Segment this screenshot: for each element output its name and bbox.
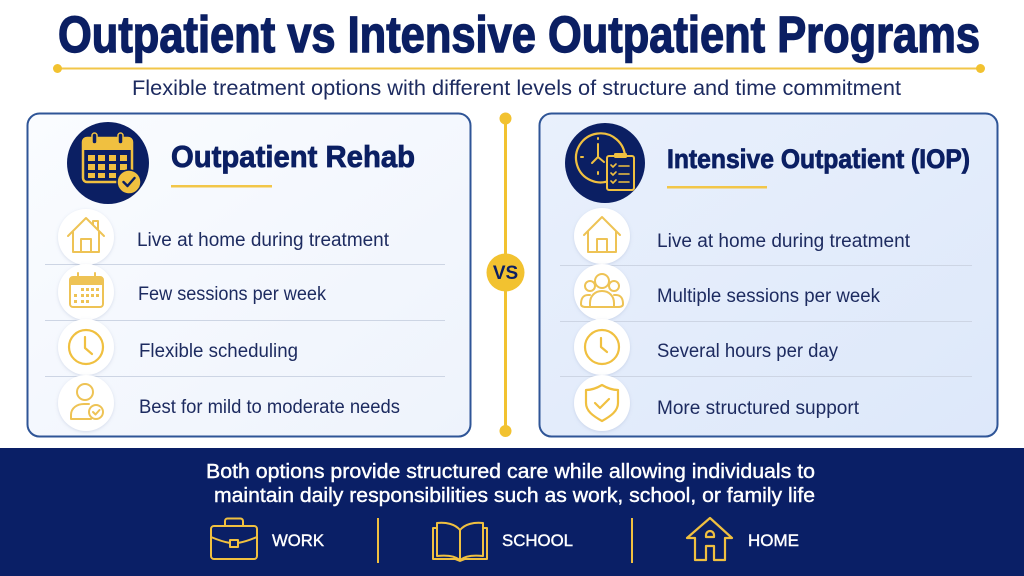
row: several hours [574,319,838,375]
row: flexible scheduling [58,319,298,375]
row: few sessions [58,264,326,320]
panel heading: Intensive Outpatient (IOP) [667,144,970,174]
row: multiple sessions [574,264,880,320]
row: several hours: Several hours per day [657,341,838,362]
row: live at home: Live at home during treatment [137,230,390,251]
panel: outpatient rehab [28,114,470,436]
icon: clock with clipboard [565,123,645,203]
row: structured support [574,375,860,431]
row: structured support: More structured support [657,398,860,419]
label: work: WORK [272,531,325,550]
row: live at home [574,208,911,264]
row: multiple sessions: Multiple sessions per week [657,286,880,307]
heading underline [171,185,272,188]
footer message [206,461,815,507]
icon: calendar with check [67,122,149,204]
row: flexible scheduling: Flexible scheduling [139,341,298,362]
label: home: HOME [748,531,799,550]
row: live at home: Live at home during treatment [657,231,911,252]
row: mild to moderate: Best for mild to moderate needs [139,397,400,418]
icon: briefcase [211,518,257,559]
panel heading: Outpatient Rehab [171,139,415,174]
vs connector: VS [493,263,518,284]
subtitle: Flexible treatment options with different levels of structure and time commitment [132,77,901,100]
footer message: maintain daily responsibilities such as work, school, or family life [214,485,815,507]
heading underline [667,186,767,188]
footer message: Both options provide structured care while allowing individuals to [206,461,815,483]
title rule with end dots [53,64,985,73]
label: school: SCHOOL [502,531,573,550]
row: live at home [58,209,390,265]
panel: intensive outpatient [540,114,998,436]
footer band [0,448,1024,576]
row: few sessions: Few sessions per week [138,284,326,305]
icon: open book [433,523,487,561]
vs connector [486,112,524,437]
icon: house [687,518,732,560]
row: mild to moderate [58,375,400,431]
